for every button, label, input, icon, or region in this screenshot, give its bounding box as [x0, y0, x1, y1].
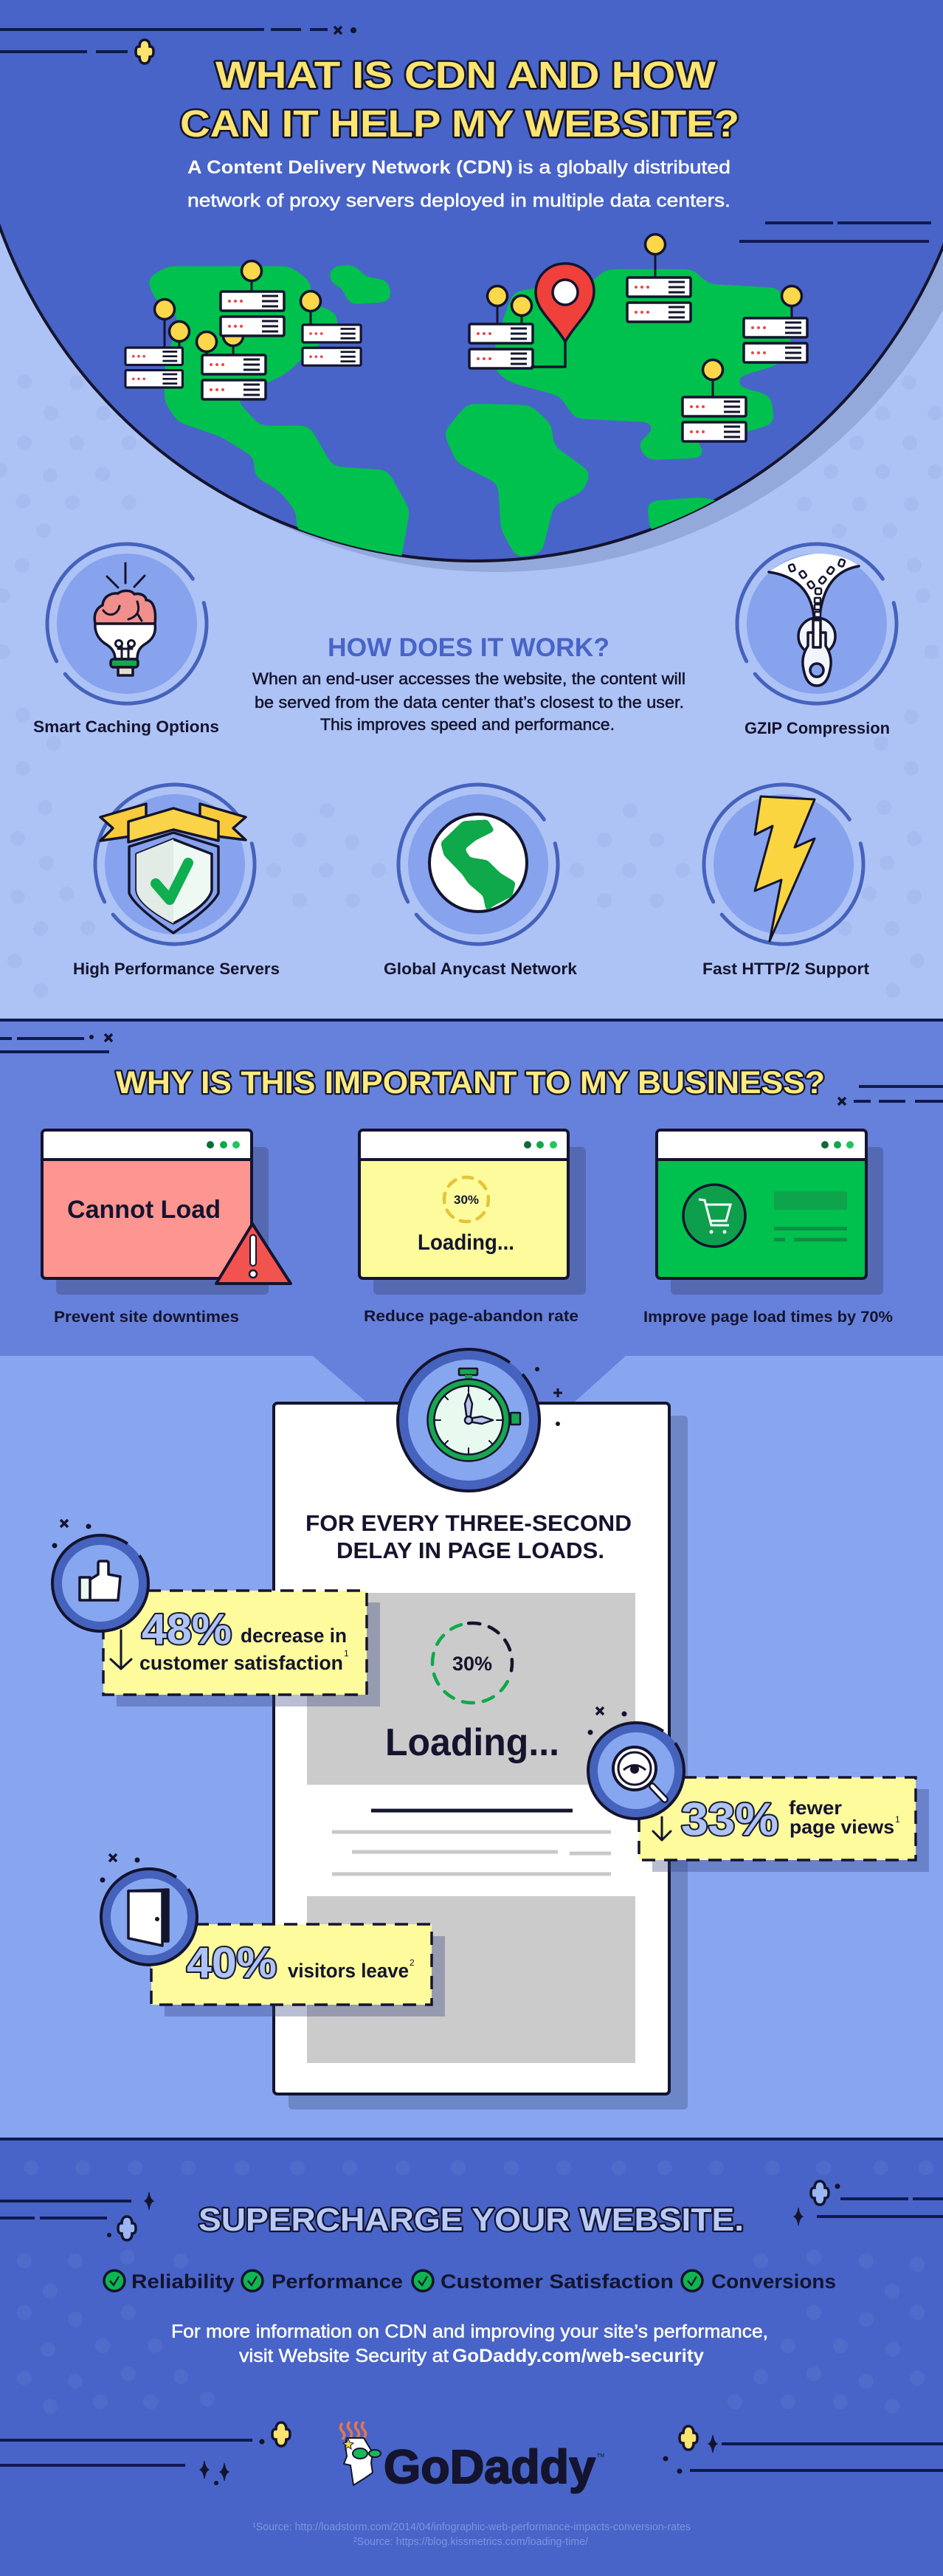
logo mascot [341, 2422, 381, 2485]
loading placeholder [307, 1593, 635, 1785]
checklist [104, 2270, 836, 2293]
icon: thumbs up [33, 1516, 167, 1650]
decorative lines section two [0, 1034, 943, 1105]
callout: 48 percent: 1 [344, 1648, 349, 1659]
callout: 40 percent [82, 1850, 445, 2017]
panel: browser store [657, 1130, 883, 1295]
loading placeholder: Loading... [385, 1721, 559, 1764]
panel: browser loading: 30% [454, 1193, 479, 1207]
checklist: Customer Satisfaction [441, 2270, 674, 2293]
callout: 48 percent: customer satisfaction [139, 1652, 343, 1674]
icon: smart caching brain bulb [30, 526, 224, 721]
panel: browser cannot load [42, 1130, 291, 1295]
call to action text: visit Website Security at [239, 2346, 449, 2366]
call to action text: For more information on CDN and improving your site’s performance, [171, 2321, 768, 2342]
label: gzip: GZIP Compression [745, 719, 890, 737]
globe [0, 0, 943, 561]
callout: 33 percent: fewer [789, 1797, 842, 1819]
decorative lines top [0, 27, 931, 241]
panel: browser loading: Loading... [418, 1230, 514, 1255]
label: http/2: Fast HTTP/2 Support [702, 960, 870, 978]
how it works body text: When an end-user accesses the website, the content will [252, 669, 685, 688]
callout: 48 percent [33, 1516, 380, 1707]
red location pin [532, 264, 594, 367]
sources: ¹Source: http://loadstorm.com/2014/04/infographic-web-performance-impacts-conversion-rates [252, 2521, 691, 2533]
callout: 40 percent: 2 [410, 1957, 415, 1968]
intro text: A Content Delivery Network (CDN) [187, 157, 513, 178]
callout: 40 percent: 40% [187, 1939, 277, 1987]
sources [252, 2521, 691, 2548]
how it works body text [252, 669, 685, 734]
title: WHAT IS CDN AND HOW [215, 54, 716, 96]
callout: 33 percent [569, 1704, 929, 1872]
checklist: Reliability [131, 2270, 235, 2293]
label: global anycast: Global Anycast Network [384, 960, 578, 978]
how it works body text: be served from the data center that’s closest to the user. [255, 693, 684, 712]
icon: lightning bolt [686, 767, 881, 962]
label: high performance servers: High Performance Servers [73, 960, 280, 978]
heading: why is this important: WHY IS THIS IMPORTANT TO MY BUSINESS? [116, 1065, 825, 1101]
sources: ²Source: https://blog.kissmetrics.com/loading-time/ [353, 2535, 589, 2548]
call to action text [171, 2321, 768, 2366]
title: CAN IT HELP MY WEBSITE? [180, 103, 739, 145]
continents [151, 269, 787, 572]
label: improve load times: Improve page load times by 70% [643, 1309, 893, 1326]
document heading: DELAY IN PAGE LOADS. [336, 1537, 604, 1563]
callout: 40 percent: visitors leave [288, 1960, 409, 1982]
icon: magnifier eye [569, 1704, 703, 1838]
intro text: is a globally distributed [518, 157, 730, 178]
icon: stopwatch [369, 1320, 568, 1520]
call to action text: GoDaddy.com/web-security [452, 2346, 704, 2366]
logo: godaddy [341, 2422, 604, 2493]
panel: document [274, 1403, 688, 2110]
heading: how does it work: HOW DOES IT WORK? [328, 633, 609, 662]
label: prevent downtimes: Prevent site downtimes [54, 1309, 239, 1326]
document heading: FOR EVERY THREE-SECOND [305, 1510, 632, 1536]
decorative lines footer [0, 2181, 943, 2485]
label: smart caching: Smart Caching Options [33, 717, 219, 736]
panel: browser cannot load: Cannot Load [67, 1196, 221, 1224]
panel: browser loading [359, 1130, 586, 1295]
document heading [305, 1510, 632, 1563]
callout: 33 percent: 1 [895, 1814, 900, 1825]
globe shadow [0, 0, 943, 572]
callout: 33 percent: page views [790, 1816, 894, 1838]
icon: zipper [719, 526, 914, 721]
how it works body text: This improves speed and performance. [320, 715, 615, 734]
callout: 48 percent: 48% [142, 1605, 232, 1653]
checklist: Conversions [711, 2270, 836, 2293]
label: reduce abandon rate: Reduce page-abandon rate [364, 1308, 578, 1325]
heading: supercharge: SUPERCHARGE YOUR WEBSITE. [198, 2202, 744, 2238]
loading placeholder: 30% [452, 1653, 492, 1675]
server stacks with pins [125, 235, 807, 441]
intro text: network of proxy servers deployed in multiple data centers. [187, 190, 730, 211]
logo: godaddy: GoDaddy [384, 2440, 595, 2493]
icon: globe [381, 767, 576, 962]
logo: godaddy: TM [597, 2453, 604, 2459]
title [180, 54, 739, 145]
intro text [187, 157, 730, 211]
icon: door [82, 1850, 216, 1984]
callout: 48 percent: decrease in [241, 1625, 347, 1647]
icon: shield with ribbon [77, 767, 272, 962]
callout: 33 percent: 33% [681, 1794, 778, 1845]
checklist: Performance [272, 2270, 403, 2293]
